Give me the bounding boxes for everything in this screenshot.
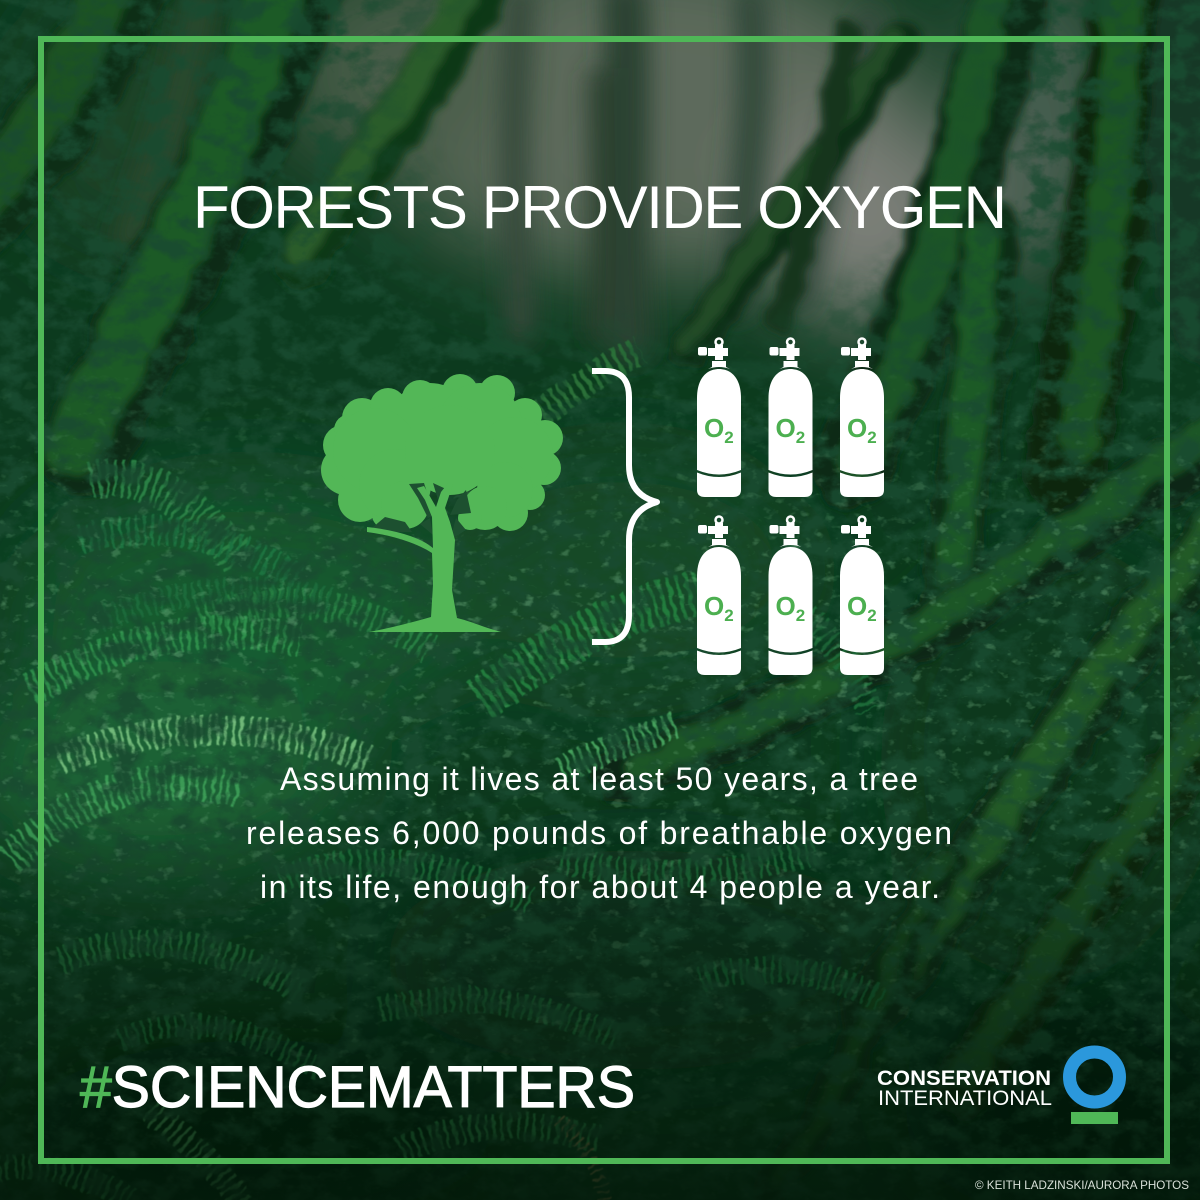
logo ring	[1070, 1052, 1120, 1102]
title: FORESTS PROVIDE OXYGEN	[193, 174, 1007, 241]
O2 label: O	[847, 591, 867, 621]
body text: in its life, enough for about 4 people a year.	[260, 869, 940, 905]
O2 label: 2	[724, 606, 734, 625]
oxygen tank 5	[768, 516, 812, 675]
body text: Assuming it lives at least 50 years, a tree	[280, 761, 918, 797]
light foliage speckle	[0, 383, 1200, 1088]
logo: Conservation International: INTERNATIONAL	[878, 1087, 1052, 1110]
O2 label: O	[704, 413, 724, 443]
logo: Conservation International	[877, 1052, 1120, 1124]
oxygen tank 2	[768, 338, 812, 497]
O2 label: O	[704, 591, 724, 621]
O2 label: 2	[796, 428, 805, 447]
oxygen tank 1	[697, 338, 741, 497]
icon: tree	[321, 374, 563, 632]
tree trunk and roots	[367, 482, 501, 632]
O2 label: O	[847, 413, 867, 443]
brace	[592, 371, 657, 642]
O2 label: 2	[724, 428, 734, 447]
oxygen tank 6	[840, 516, 884, 675]
tree trunk gaps	[372, 483, 471, 540]
O2 label: O	[776, 591, 796, 621]
oxygen tank 4	[697, 516, 741, 675]
O2 label: O	[776, 413, 796, 443]
body text: releases 6,000 pounds of breathable oxygen	[246, 815, 952, 851]
photo credit: © KEITH LADZINSKI/AURORA PHOTOS	[975, 1178, 1189, 1192]
O2 label: 2	[867, 428, 877, 447]
oxygen tank 3	[840, 338, 884, 497]
body text	[246, 761, 952, 905]
fern fronds	[0, 350, 880, 1200]
hashtag: #sciencematters: #SCIENCEMATTERS	[80, 1055, 635, 1120]
O2 label: 2	[796, 606, 805, 625]
O2 label: 2	[867, 606, 877, 625]
distant trunks	[130, 0, 870, 340]
logo bar	[1071, 1112, 1118, 1124]
logo: Conservation International: CONSERVATION	[877, 1067, 1051, 1090]
